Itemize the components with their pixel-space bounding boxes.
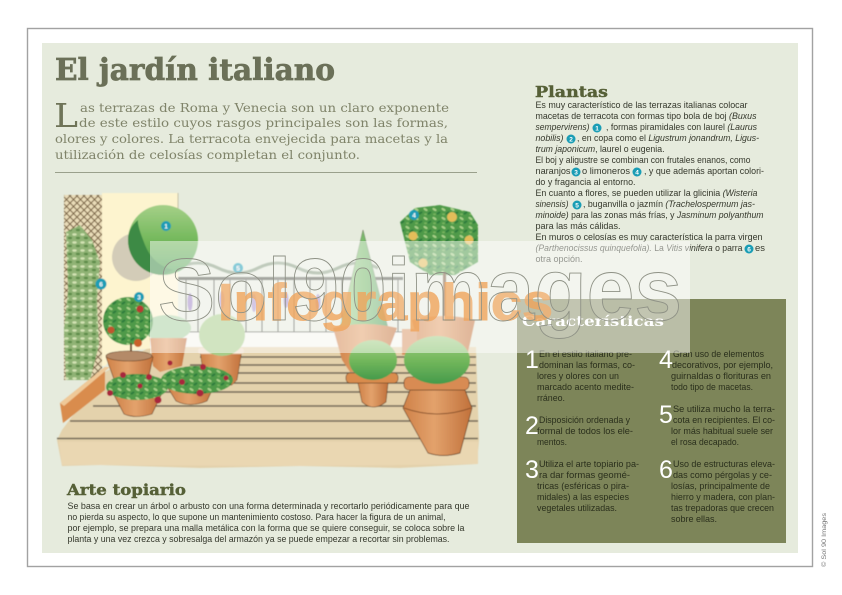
text block: Plantas: do y fragancia al entorno. (536, 177, 636, 187)
text block: Plantas: 6 (747, 246, 751, 254)
text block: Arte topiario: por ejemplo, se prepara una malla metálica con la forma que se quiere conseguir, se coloca sobre la (68, 523, 465, 533)
text block: Plantas: otra opción. (536, 254, 582, 264)
text block: Plantas: sempervirens) (536, 122, 590, 132)
sphere topiary in small pot (346, 340, 398, 407)
text block: Plantas: , formas piramidales con laurel (Laurus (606, 122, 757, 132)
intro text block: de este estilo cuyos rasgos principales son las formas, (79, 116, 448, 130)
cone topiary (333, 230, 397, 372)
wall shadow of sphere (112, 233, 160, 281)
text block: Plantas: 2 (569, 136, 573, 144)
item 5: el rosa decapado. (671, 437, 739, 447)
item 5: lor más habitual suele ser (671, 426, 773, 436)
text block: Plantas: 4 (635, 170, 639, 176)
sphere topiary in mid pot (198, 314, 245, 385)
badge 5 (233, 263, 243, 273)
badge 4: 4 (412, 212, 416, 220)
item 2: Disposición ordenada y (539, 415, 630, 425)
intro text block (54, 96, 449, 162)
item 6: hierro y madera, con plan- (671, 492, 775, 502)
badge 4 (409, 210, 419, 220)
badge 6 (96, 278, 106, 290)
text block: Plantas: El boj y aligustre se combinan con frutales enanos, como (536, 155, 750, 165)
item 5: 5 (659, 401, 673, 429)
item 1: dominan las formas, co- (539, 360, 635, 370)
text block: Plantas: es (755, 243, 765, 253)
railing with climbing wisteria (150, 263, 410, 347)
panel: Características (517, 299, 786, 543)
item 3: vegetales utilizadas. (537, 503, 617, 513)
item 1: lores y olores con un (537, 371, 619, 381)
item 5: Se utiliza mucho la terra- (673, 404, 775, 414)
wall (102, 193, 178, 366)
text block: Arte topiario (68, 501, 470, 544)
credit: © Sol 90 Images (820, 512, 828, 567)
item 2: formal de todos los ele- (537, 426, 633, 436)
watermark: Sol90images (158, 240, 682, 339)
heading: Plantas: Plantas (535, 83, 608, 101)
item 5 (659, 401, 775, 447)
item 1 (525, 346, 635, 403)
item 5: cota en recipientes. El co- (673, 415, 775, 425)
text block: Plantas: trum japonicum, laurel o eugenia. (536, 144, 664, 154)
item 3: ra dar formas geomé- (539, 470, 630, 480)
badge 6: 6 (99, 282, 103, 288)
sphere topiary in large pot (403, 336, 472, 456)
item 3: Utiliza el arte topiario pa- (539, 459, 639, 469)
badge 1 (161, 221, 171, 231)
text block: Plantas: , y que además aportan colori- (644, 166, 764, 176)
item 3 (525, 456, 639, 513)
watermark: Infographics (218, 274, 553, 332)
badge 3 (134, 292, 144, 302)
text block: Plantas: sinensis) (536, 199, 568, 209)
trellis and vine (60, 195, 110, 423)
text block: Plantas: En cuanto a flores, se pueden utilizar la glicinia (Wisteria (536, 188, 758, 198)
floor deck (57, 347, 479, 468)
intro text block: olores y colores. La terracota envejecida para macetas y la (55, 132, 448, 146)
intro text block: as terrazas de Roma y Venecia son un claro exponente (80, 101, 449, 115)
intro text block: utilización de celosías completan el conjunto. (55, 148, 360, 162)
badge 1: 1 (164, 224, 168, 230)
text block: Arte topiario: Se basa en crear un árbol o arbusto con una forma determinada y recortarlo periódicamente para que (68, 501, 470, 511)
back pot with pale foliage (143, 315, 191, 372)
item 3: tricas (esféricas o pira- (537, 481, 629, 491)
small orange tree (103, 297, 153, 382)
item 6: das como pérgolas y ce- (673, 470, 772, 480)
sphere topiary on wall (128, 205, 198, 275)
item 6: Uso de estructuras eleva- (673, 459, 775, 469)
lemon tree (400, 205, 478, 355)
title: El jardín italiano (55, 53, 335, 88)
item 6: sobre ellas. (671, 514, 717, 524)
text block: Plantas: 5 (575, 202, 579, 210)
text block: Plantas: para las más cálidas. (536, 221, 620, 231)
text block: Plantas: nobilis) (536, 133, 564, 143)
text block: Arte topiario: planta y una vez crezca y sobresalga del armazón ya se puede empezar a recortar sin problemas. (68, 534, 450, 544)
item 1: 1 (525, 346, 539, 374)
text block: Plantas: 1 (595, 126, 599, 132)
item 3: 3 (525, 456, 539, 484)
text block: Plantas: minoide) para las zonas más frías, y Jasminum polyanthum (536, 210, 764, 220)
badge 5: 5 (236, 266, 240, 272)
section: Arte topiario (66, 481, 469, 544)
item 6: losías, principalmente de (671, 481, 770, 491)
text block: Plantas: naranjos (536, 166, 571, 176)
item 1: En el estilo italiano pre- (539, 349, 632, 359)
item 6 (659, 456, 775, 524)
text block: Plantas: 3 (574, 170, 578, 176)
item 1: rráneo. (537, 393, 565, 403)
text block: Plantas (536, 100, 765, 264)
flower pot left (106, 372, 168, 416)
item 2: 2 (525, 412, 539, 440)
item 4 (659, 346, 773, 392)
heading: Características: Características (522, 314, 664, 330)
item 4: decorativos, por ejemplo, (672, 360, 773, 370)
illustration: Italian terrace (57, 193, 479, 468)
item 6: 6 (659, 456, 673, 484)
item 4: Gran uso de elementos (673, 349, 764, 359)
text block: Plantas: , en copa como el Ligustrum jonandrum, Ligus- (577, 133, 759, 143)
flower pot right (161, 360, 233, 404)
text block: Plantas: macetas de terracota con formas tipo bola de boj (Buxus (536, 111, 757, 121)
item 4: 4 (659, 346, 673, 374)
intro text block: L (54, 96, 78, 135)
text block: Plantas: o limoneros (582, 166, 630, 176)
item 1: marcado acento medite- (537, 382, 634, 392)
text block: Plantas: Es muy característico de las terrazas italianas colocar (536, 100, 748, 110)
item 2 (525, 412, 633, 447)
item 2: mentos. (537, 437, 567, 447)
section: Plantas (535, 83, 765, 264)
item 6: tas trepadoras que crecen (671, 503, 774, 513)
panel: background (42, 43, 798, 553)
heading: Arte topiario: Arte topiario (66, 481, 186, 499)
item 4: todo tipo de macetas. (671, 382, 753, 392)
text block: Arte topiario: no pierda su aspecto, lo que supone un mantenimiento costoso. Para hacer la figura de un animal, (68, 512, 446, 522)
item 4: guirnaldas o florituras en (671, 371, 771, 381)
text block: Plantas: En muros o celosías es muy característica la parra virgen (536, 232, 762, 242)
badge 3: 3 (137, 294, 141, 302)
item 3: midales) a las especies (537, 492, 629, 502)
text block: Plantas: (Parthenocissus quinquefolia). La Vitis vinifera o parra (536, 243, 743, 253)
text block: Plantas: , buganvilla o jazmín (Trachelospermum jas- (583, 199, 755, 209)
